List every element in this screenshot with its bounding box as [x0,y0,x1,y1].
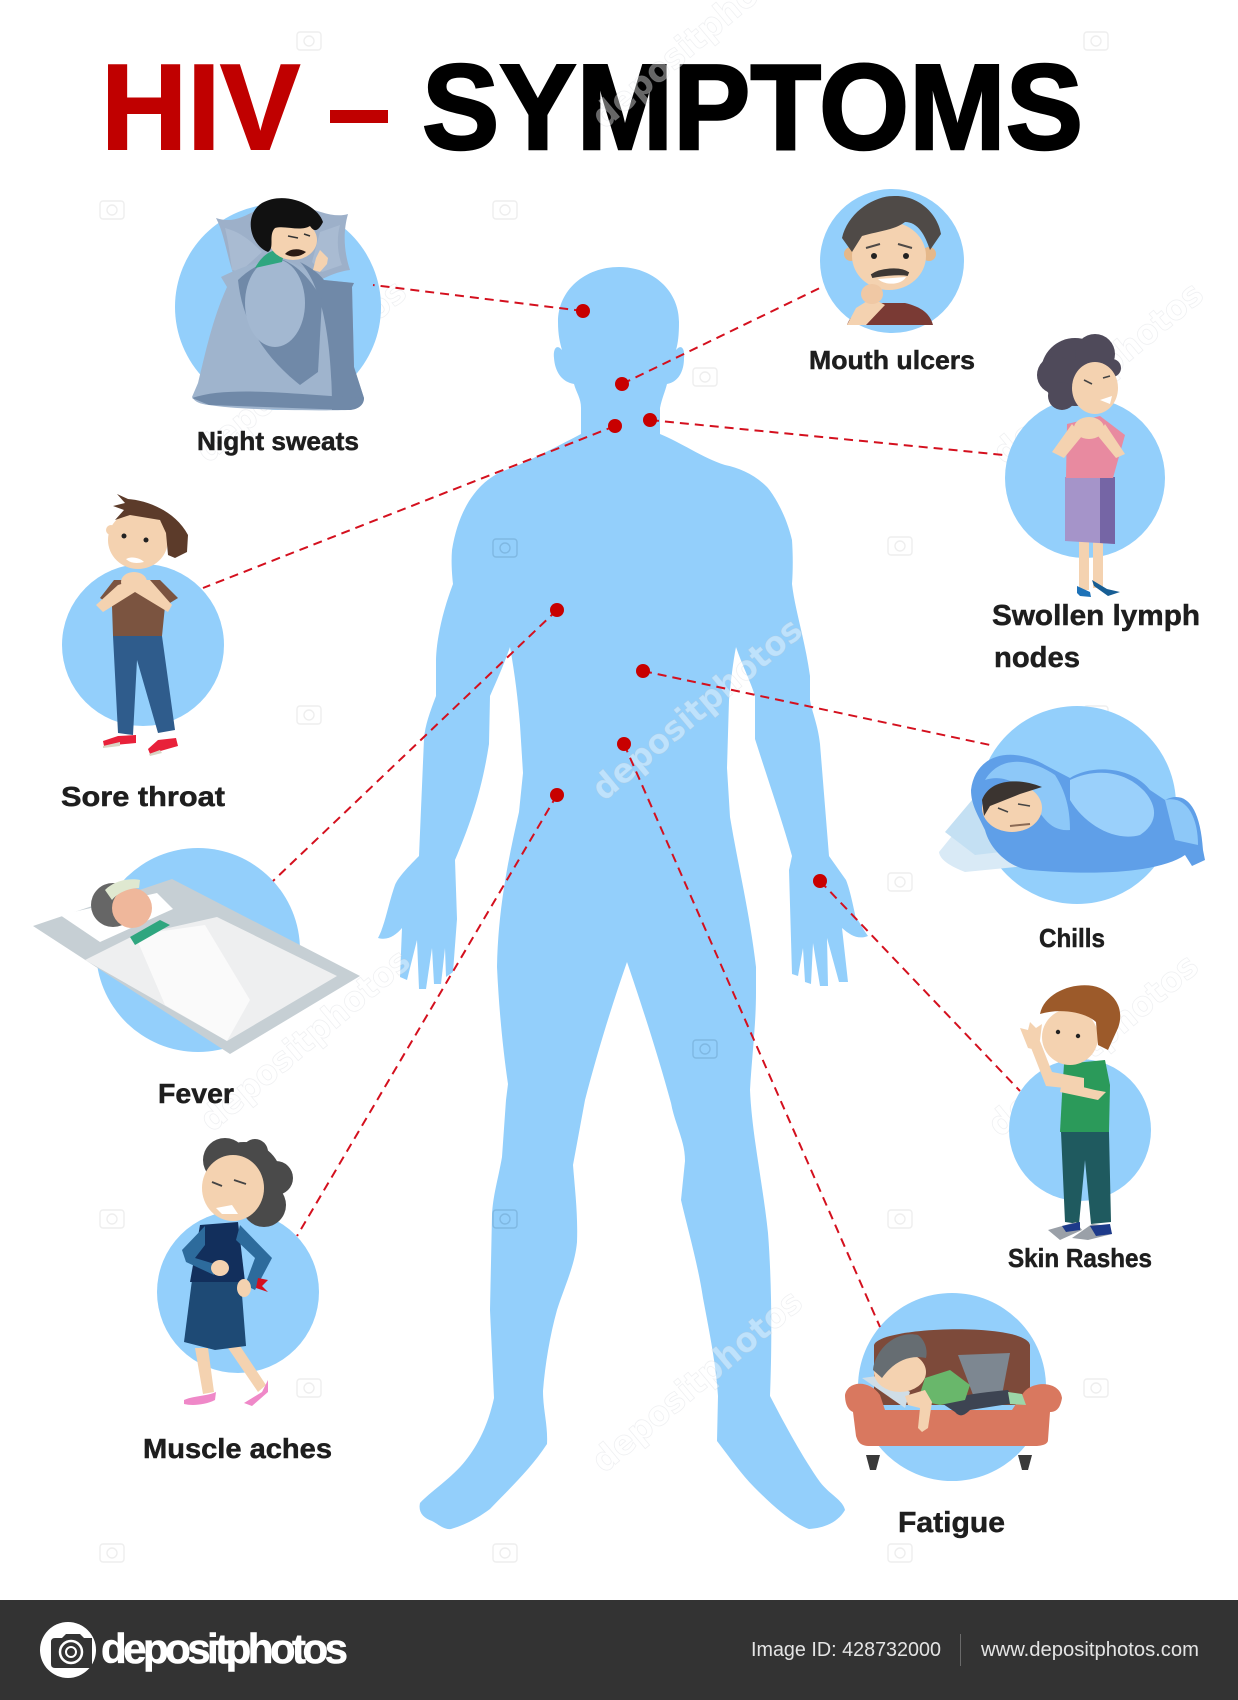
connector lines [203,285,1020,1327]
label: Swollen lymph nodes: nodes [994,642,1080,674]
blue circle [157,1211,319,1373]
body silhouette [378,267,868,1529]
diagonal watermark text: depositphotos [192,941,418,1140]
illustration: boy scratching arm [1020,985,1120,1240]
title word: HIV: HIV [101,39,300,175]
image id: Image ID: 428732000 [751,1639,941,1661]
illustration: boy holding throat [96,494,188,756]
label: Swollen lymph nodes [992,600,1200,674]
website: www.depositphotos.com [980,1639,1199,1661]
blue circle [175,204,381,410]
diagonal watermark text: depositphotos [584,610,810,809]
panel: sore throat [62,494,224,756]
illustration: woman holding throat [1037,334,1125,597]
label: Night sweats: Night sweats [197,426,359,456]
panel: chills [939,706,1205,904]
title word: SYMPTOMS: SYMPTOMS [422,39,1083,175]
blue circle [820,189,964,333]
panel: mouth ulcers [820,189,964,333]
blue circle [858,1293,1046,1481]
diagonal watermark text: depositphotos [188,272,414,471]
label: Fever: Fever [158,1078,234,1109]
title [101,39,1083,175]
illustration: person under blanket [192,198,364,410]
diagonal watermark text: depositphotos [985,274,1211,473]
label: Mouth ulcers: Mouth ulcers [809,345,975,375]
diagonal watermark text: depositphotos [584,1282,810,1481]
illustration: person lying in bed [33,879,360,1054]
blue circle [1009,1059,1151,1201]
illustration: man touching mouth [842,196,941,325]
title dash [330,110,388,123]
label: Muscle aches: Muscle aches [143,1433,332,1464]
panel: swollen lymph nodes [1005,334,1165,597]
camera icons on body [493,539,717,1228]
panel: skin rashes [1009,985,1151,1240]
label: Skin Rashes: Skin Rashes [1008,1243,1152,1273]
icon: camera logo [40,1622,96,1678]
panel: night sweats [175,198,381,410]
brand name: depositphotos [101,1625,348,1672]
illustration: person shivering under blanket [939,755,1205,873]
diagonal watermark text [188,0,1211,1481]
panel: muscle aches [157,1138,319,1406]
footer separator [960,1634,961,1666]
background watermark camera icons [100,32,1108,1562]
footer bar [0,1600,1238,1700]
blue circle [96,848,300,1052]
blue circle [1005,398,1165,558]
panel: fever [33,848,360,1054]
illustration: person sleeping on sofa [845,1329,1062,1470]
label: Fatigue: Fatigue [898,1507,1005,1539]
blue circle [978,706,1176,904]
panel: fatigue [845,1293,1062,1481]
illustration: woman with stomach pain [182,1138,293,1406]
label: Chills: Chills [1039,923,1105,953]
blue circle [62,564,224,726]
label: Sore throat: Sore throat [61,781,225,812]
diagonal watermark text: depositphotos [980,946,1206,1145]
label: Swollen lymph nodes: Swollen lymph [992,600,1200,632]
body marker dots [550,304,827,888]
